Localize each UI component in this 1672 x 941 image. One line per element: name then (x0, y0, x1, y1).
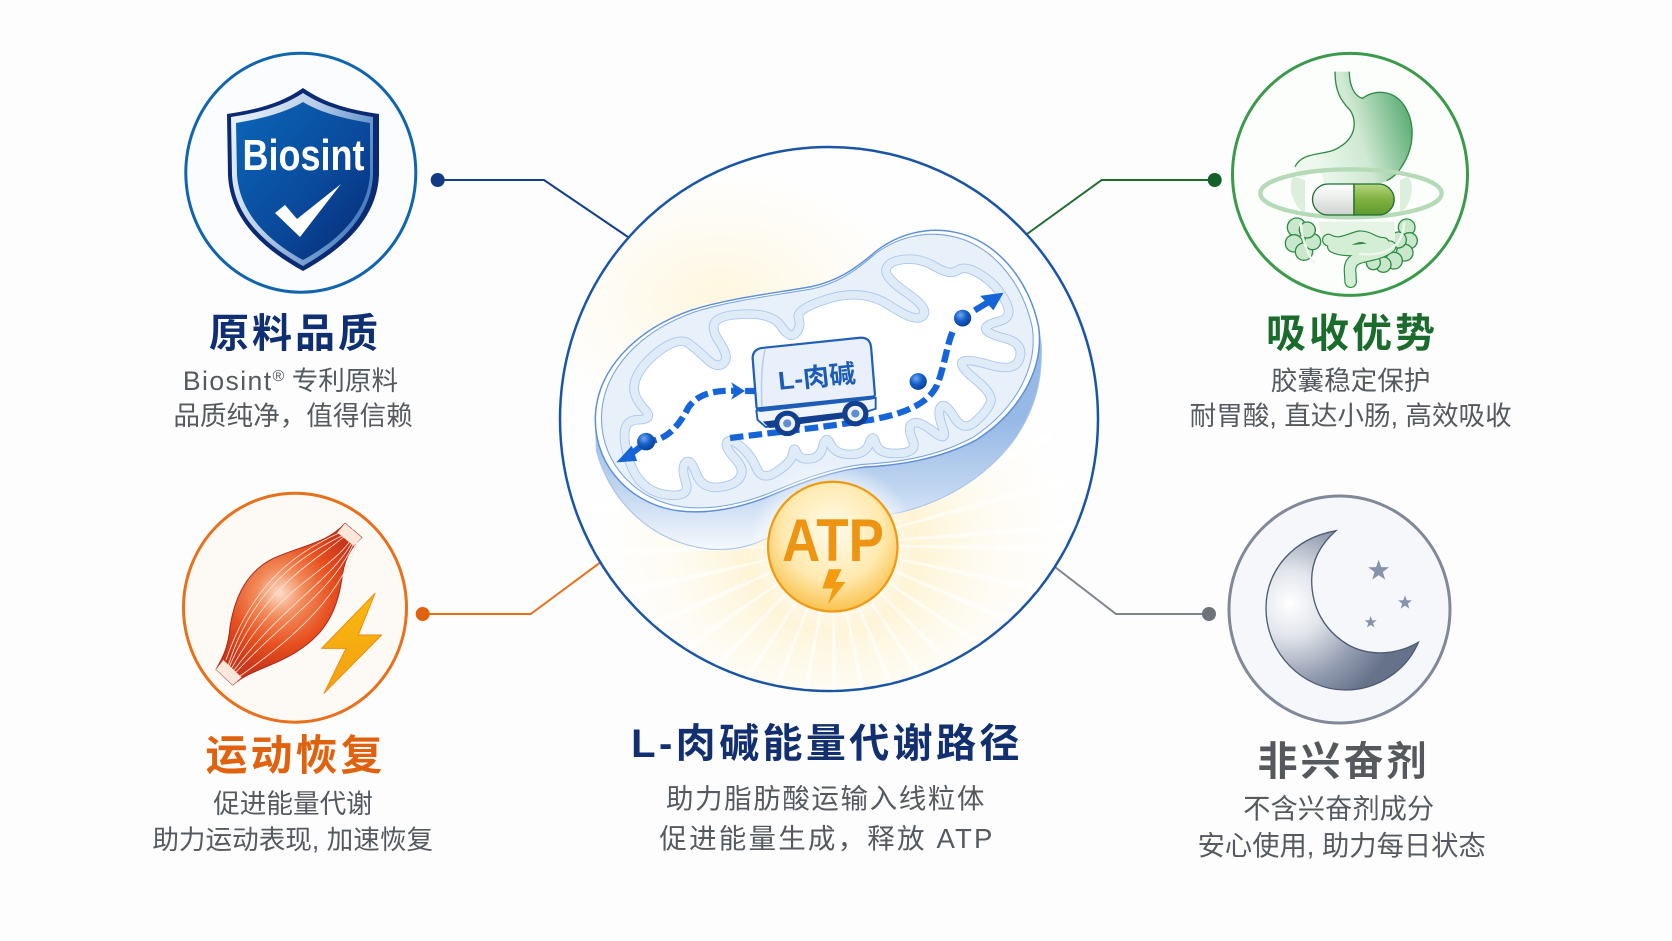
heading: absorption advantage: 吸收优势 (1266, 312, 1438, 356)
text: raw material description: 品质纯净，值得信赖 (173, 401, 413, 431)
connector: non-stimulant (1055, 567, 1216, 621)
mitochondrion illustration (595, 230, 1041, 631)
truck: L-肉碱 (777, 359, 857, 396)
panel: non-stimulant (1198, 496, 1486, 861)
ATP halo (748, 462, 917, 631)
text: absorption description: 胶囊稳定保护 (1271, 366, 1430, 396)
heading: exercise recovery: 运动恢复 (205, 732, 386, 779)
text: recovery description: 促进能量代谢 (213, 789, 373, 819)
panel: exercise recovery (152, 493, 433, 855)
icon: ATP bolt (822, 569, 846, 605)
ATP label: ATP (782, 507, 884, 574)
text: recovery description: 助力运动表现, 加速恢复 (152, 825, 433, 855)
icon: Biosint shield (186, 53, 416, 292)
icon: stomach, capsule and intestines (1232, 53, 1468, 295)
infographic canvas (153, 52, 1511, 858)
truck (753, 338, 876, 436)
icon: Biosint shield: Biosint (243, 132, 364, 180)
icon: moon and stars (1229, 496, 1450, 723)
text: absorption description: 耐胃酸, 直达小肠, 高效吸收 (1190, 401, 1512, 431)
icon: muscle with lightning (184, 493, 406, 722)
panel: central mitochondrion circle (558, 146, 1100, 692)
panel: central caption (631, 722, 1023, 854)
energy glow and rays (569, 186, 1077, 690)
heading: non-stimulant: 非兴奋剂 (1258, 740, 1430, 784)
panel: raw material quality (173, 53, 416, 431)
text: non-stimulant description: 安心使用, 助力每日状态 (1198, 830, 1486, 861)
text: pathway description: 助力脂肪酸运输入线粒体 (666, 783, 986, 814)
dashed transport path (630, 301, 990, 454)
heading: L-carnitine energy metabolism pathway: L-肉碱能量代谢路径 (631, 722, 1023, 766)
ATP coin (768, 482, 897, 612)
arrowheads (616, 293, 1004, 462)
connector: exercise recovery (416, 563, 600, 621)
heading: raw material quality: 原料品质 (209, 312, 381, 356)
text: raw material description: ® (273, 368, 285, 385)
large intestine scallops (1285, 218, 1417, 272)
carrier balls (637, 310, 971, 450)
panel: absorption advantage (1190, 53, 1512, 431)
text: raw material description: Biosint (183, 366, 273, 396)
connector: raw material quality (431, 173, 628, 237)
small intestine tube (1301, 223, 1404, 282)
text: non-stimulant description: 不含兴奋剂成分 (1243, 793, 1434, 824)
text: pathway description: 促进能量生成，释放 ATP (659, 823, 995, 854)
text: raw material description: 专利原料 (284, 366, 398, 396)
connector: absorption (1027, 173, 1222, 234)
